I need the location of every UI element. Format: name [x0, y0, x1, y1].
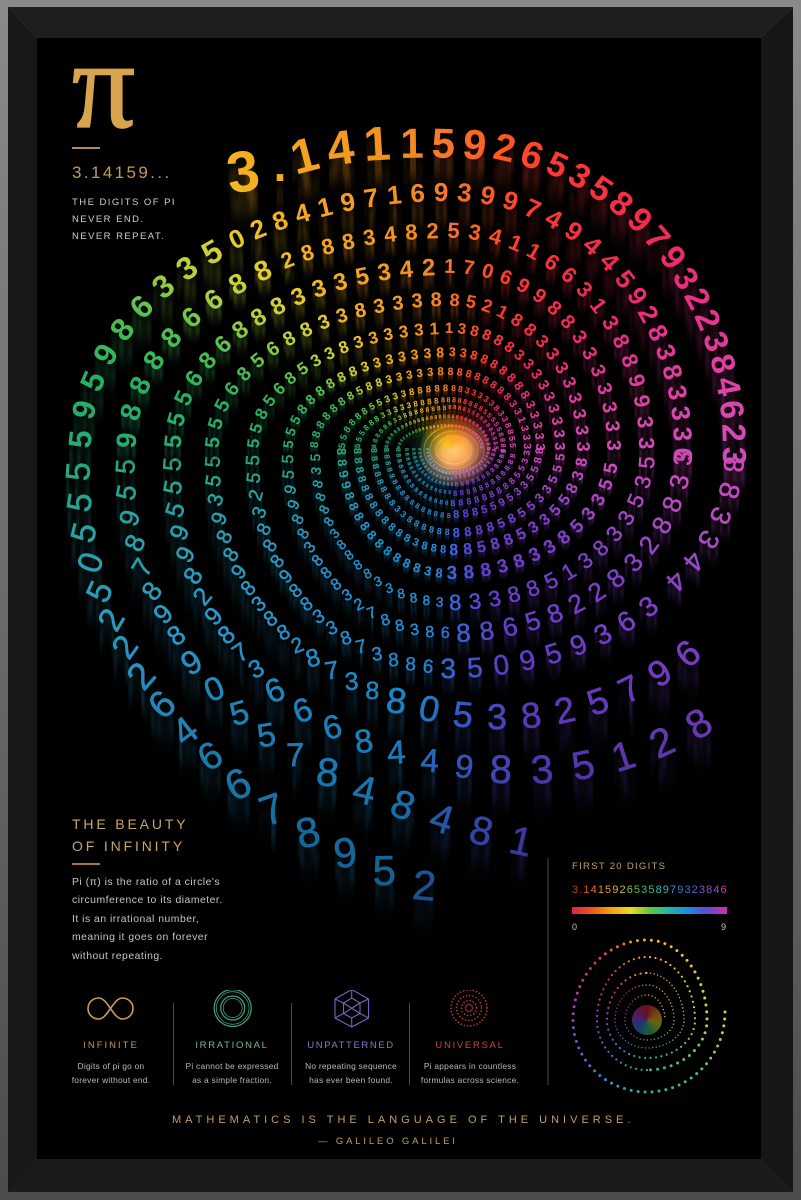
panel: first 20 digits	[572, 861, 728, 932]
inner dotted arm	[615, 973, 684, 1048]
scale minimum: 0	[572, 922, 577, 932]
description	[185, 1061, 279, 1085]
upper ring nine: 55588833333888888888888555558888	[354, 397, 506, 459]
pi value: 3.14159...	[72, 163, 172, 182]
body text: Pi (π) is the ratio of a circle's	[72, 876, 220, 888]
spiral core rings	[407, 403, 499, 495]
icon: dotted circles	[450, 990, 488, 1027]
arm four lower half: 55398898388287388053825796	[204, 456, 700, 756]
big digit three: 3	[223, 138, 263, 206]
body text	[72, 876, 223, 962]
title block	[72, 17, 176, 242]
body text: meaning it goes on forever	[72, 932, 208, 943]
heading: OF INFINITY	[72, 838, 185, 854]
feature: irrational	[185, 990, 279, 1085]
arm one lower half: 55505222646678952	[66, 463, 434, 926]
label: INFINITE	[83, 1040, 139, 1051]
scale maximum: 9	[721, 922, 726, 932]
description: Pi appears in countless	[424, 1061, 516, 1071]
decimal point: .	[274, 139, 286, 191]
label: UNPATTERNED	[307, 1040, 395, 1051]
glowing centre	[420, 416, 490, 486]
rainbow scale bar	[572, 907, 727, 914]
description: as a simple fraction.	[192, 1075, 272, 1085]
body text: without repeating.	[72, 950, 163, 962]
label: UNIVERSAL	[435, 1040, 505, 1051]
description	[421, 1061, 519, 1085]
coloured digit string: 3.14159265358979323846	[572, 884, 728, 896]
attribution: — GALILEO GALILEI	[318, 1136, 458, 1147]
body text: It is an irrational number,	[72, 914, 199, 924]
mini core	[632, 1005, 662, 1035]
heading: THE BEAUTY	[72, 816, 188, 832]
arm three lower half: 555998298736668449835128	[162, 458, 712, 811]
tagline	[72, 197, 176, 242]
middle dotted arm	[597, 957, 695, 1070]
feature: infinite	[72, 997, 150, 1085]
tagline: NEVER END.	[72, 214, 145, 225]
icon: concentric rings	[214, 990, 252, 1028]
tagline: THE DIGITS OF PI	[72, 197, 176, 208]
pi symbol: π	[72, 17, 135, 155]
panel heading: FIRST 20 DIGITS	[572, 861, 666, 872]
description: No repeating sequence	[305, 1061, 397, 1071]
gold rule	[72, 147, 100, 148]
section: the beauty of infinity	[72, 816, 223, 962]
gold rule	[72, 863, 100, 864]
label: IRRATIONAL	[195, 1040, 269, 1051]
quote line: MATHEMATICS IS THE LANGUAGE OF THE UNIVERSE.	[172, 1114, 634, 1126]
mini spiral	[565, 934, 735, 1100]
heading	[72, 816, 188, 854]
column dividers	[173, 858, 548, 1085]
feature: unpatterned	[305, 990, 397, 1085]
description: has ever been found.	[309, 1075, 393, 1085]
outer digit arms	[66, 126, 746, 926]
description: Pi cannot be expressed	[185, 1061, 279, 1071]
description: forever without end.	[72, 1075, 150, 1085]
icon: hexagonal cube	[334, 990, 370, 1028]
description: formulas across science.	[421, 1075, 519, 1085]
outer dotted arm	[573, 940, 725, 1092]
middle digit rings	[116, 222, 744, 694]
description	[72, 1061, 150, 1085]
inner digit rings	[283, 347, 618, 586]
lower ring nine: 88888888888838888858853355838	[354, 448, 587, 562]
mini colour wash	[565, 934, 735, 1100]
icon: infinity	[87, 997, 134, 1020]
body text: circumference to its diameter.	[72, 895, 223, 906]
description: Digits of pi go on	[78, 1061, 144, 1071]
feature: universal	[421, 990, 519, 1085]
description	[305, 1061, 397, 1085]
closing quote	[172, 1114, 634, 1147]
arm two lower half: 5598789890557848481	[115, 460, 528, 883]
tagline: NEVER REPEAT.	[72, 231, 165, 242]
